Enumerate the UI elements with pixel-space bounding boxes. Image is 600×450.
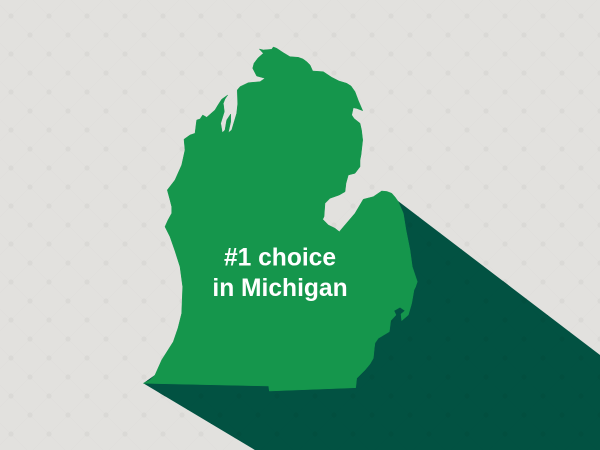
headline text: in Michigan [212,275,348,302]
long shadow of the state [143,201,600,450]
headline text: #1 choice [224,244,336,272]
map: lower peninsula of Michigan [143,47,417,391]
headline text [212,244,348,302]
